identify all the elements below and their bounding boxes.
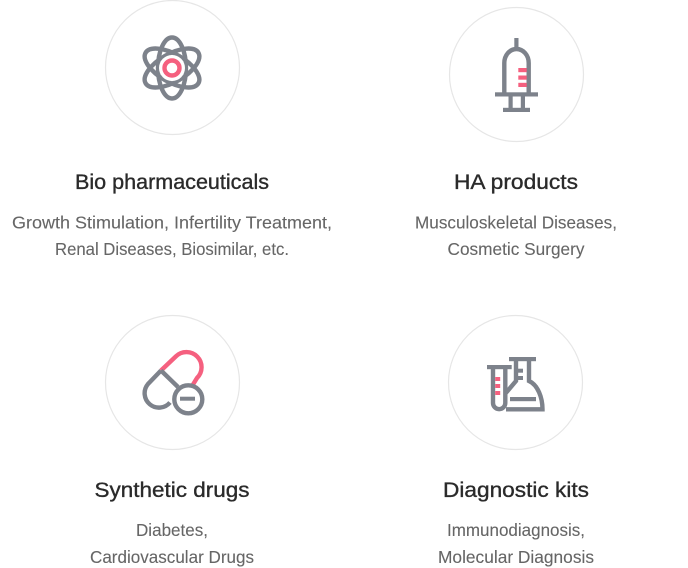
icon circle: atom: [106, 0, 240, 134]
icon circle: syringe: [450, 8, 584, 142]
text: Synthetic drugs description: Diabetes,: [136, 520, 208, 540]
text: Diagnostic kits description: Molecular Diagnosis: [438, 547, 594, 567]
text: Diagnostic kits description: Immunodiagnosis,: [447, 520, 585, 540]
icon: syringe: [495, 38, 538, 112]
text: Synthetic drugs description: Cardiovascular Drugs: [90, 547, 254, 567]
heading: Synthetic drugs: Synthetic drugs: [94, 479, 250, 502]
text: HA products description: Cosmetic Surgery: [448, 239, 585, 259]
panel: HA products: [415, 8, 617, 259]
text: Diagnostic kits description: [438, 520, 594, 567]
text: HA products description: Musculoskeletal Diseases,: [415, 212, 617, 232]
text: Bio pharmaceuticals description: Renal Diseases, Biosimilar, etc.: [55, 239, 289, 259]
text: Bio pharmaceuticals description: Growth Stimulation, Infertility Treatment,: [12, 212, 332, 232]
panel: Bio pharmaceuticals: [12, 0, 332, 259]
text: Synthetic drugs description: [90, 520, 254, 567]
panel: Synthetic drugs: [90, 316, 254, 567]
icon circle: pill: [106, 316, 240, 450]
heading: HA products: HA products: [454, 171, 578, 194]
text: Bio pharmaceuticals description: [12, 212, 332, 259]
icon: atom: [139, 38, 205, 98]
panel: Diagnostic kits: [438, 316, 594, 567]
icon circle: lab flask: [448, 316, 582, 450]
text: HA products description: [415, 212, 617, 259]
heading: Bio pharmaceuticals: Bio pharmaceuticals: [75, 171, 269, 194]
icon: lab flask and test tube: [487, 357, 542, 409]
icon: pill: [145, 352, 202, 413]
heading: Diagnostic kits: Diagnostic kits: [443, 479, 589, 502]
